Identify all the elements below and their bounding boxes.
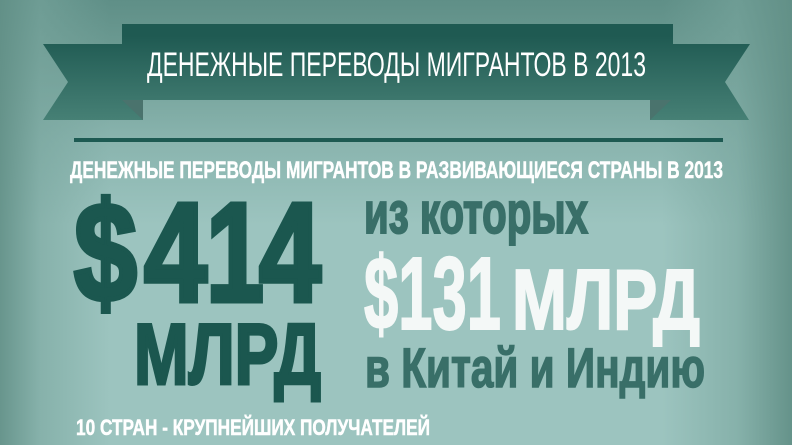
amount figure: 4 [144, 173, 207, 331]
amount unit: МЛРД [134, 307, 321, 403]
ribbon centre band [122, 24, 673, 100]
amount figure: $ [74, 173, 137, 331]
divider line [74, 138, 723, 142]
China and India amount [364, 236, 700, 351]
share unit: МЛРД [512, 253, 700, 348]
share figure: $131 [364, 236, 501, 351]
amount figure [74, 173, 321, 331]
of which label: из которых [364, 181, 588, 246]
amount figure: 1 [206, 173, 264, 331]
ribbon right fold [650, 100, 671, 120]
total amount [74, 173, 321, 403]
amount figure: 4 [259, 173, 321, 331]
ribbon left fold [122, 100, 143, 120]
title ribbon [43, 24, 750, 120]
ribbon left tail [43, 44, 143, 120]
top ten heading: 10 СТРАН - КРУПНЕЙШИХ ПОЛУЧАТЕЛЕЙ [76, 415, 430, 440]
ribbon right tail [650, 44, 750, 120]
